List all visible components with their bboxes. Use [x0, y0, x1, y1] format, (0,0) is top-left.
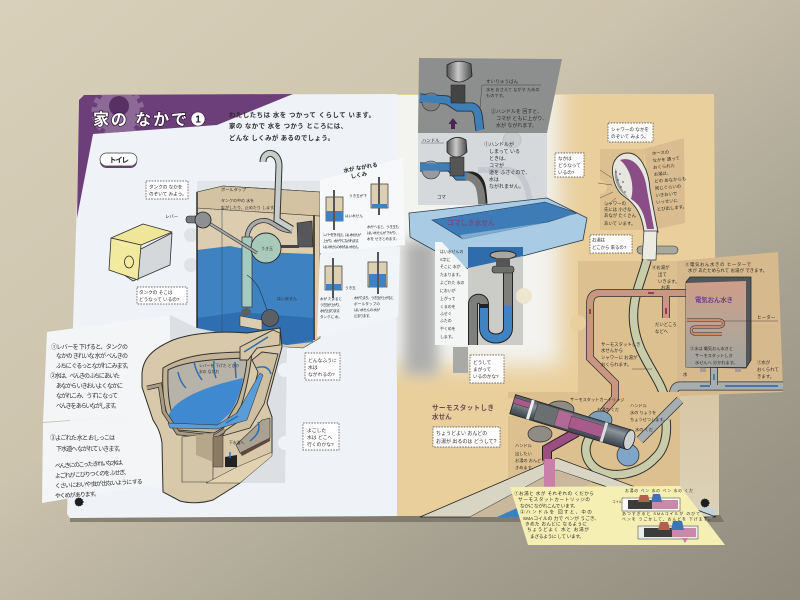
flap: how water flows, upper: 水が へると、うき玉も — [367, 224, 399, 229]
gear decoration — [92, 94, 144, 134]
flap: step 3: 下水道へ ながれて いきます。 — [56, 445, 124, 453]
flap: how water flows, upper: うき玉が下 — [349, 193, 367, 198]
panel step text: ①ハンドルが — [484, 141, 514, 148]
flap: how water flows, lower: 止まります。 — [354, 313, 372, 318]
panel notches — [278, 363, 292, 377]
heater labels: シャワーに お湯が — [601, 354, 638, 361]
cartridge diagram bottom — [638, 521, 698, 543]
mini tank diagram 1 — [326, 190, 343, 230]
flap: step 3: ③よごれた 水と おしっこは — [50, 434, 115, 442]
intro text: 家の なかで 水を つかう ところには、 — [229, 121, 347, 130]
heater coil — [687, 320, 724, 334]
explanation card: ②ハンドルを 回すと、中の — [520, 508, 592, 516]
callout: why bent: どうして — [473, 359, 492, 366]
narrow flap: trap explanation: ふたの — [440, 318, 452, 323]
heater labels: 水せんから — [601, 347, 623, 354]
faucet upper dark card: ものです。 — [486, 93, 507, 99]
flap: how water flows, upper: レバーを 下げると、はい水せんが — [323, 232, 361, 237]
callout: look inside tank: のぞいて みよう。 — [149, 190, 187, 198]
heater labels: ヒーター — [757, 314, 776, 321]
flap: how water flows, lower: ボールタップの — [354, 301, 380, 306]
shower texts: 同じぐらいの — [655, 184, 681, 192]
lever arm — [207, 222, 257, 253]
faucet lower panel: 道を ふさぐので、 — [489, 169, 530, 176]
callout: look inside shower: のぞいて みよう。 — [611, 133, 649, 140]
panel notches on tank — [184, 228, 198, 272]
callout: why bent — [470, 355, 504, 383]
flap: step 1 and 2: あなから いきおいよく なかに — [56, 383, 123, 390]
shower head — [612, 153, 678, 260]
number badge — [191, 112, 205, 126]
heater labels: 出て — [658, 271, 667, 278]
narrow flap: trap explanation — [435, 242, 468, 345]
flap: how water flows, lower: 水が 止まります。 — [320, 308, 342, 313]
flap: step 1 and 2: ①レバーを 下げると、タンクの — [51, 343, 128, 351]
narrow flap: trap explanation: くるのを — [440, 304, 456, 309]
thermostat labels: ハンドル — [515, 443, 532, 448]
card texts: すいりゅうばん — [486, 78, 519, 85]
heater labels: ①水が — [757, 359, 771, 366]
faucet lower panel — [418, 132, 547, 205]
trapway water — [168, 373, 263, 429]
faucet upper dark card: 水を おさえて ながす ための — [486, 86, 540, 93]
hot water pipes — [590, 293, 686, 415]
faucet lower panel: 水は — [489, 176, 499, 183]
mini tank diagram 2 — [371, 177, 388, 215]
explanation card: きめた おんどに なるように — [525, 520, 587, 528]
chain — [247, 275, 268, 312]
toilet bowl cutaway: 水の ながれ — [199, 369, 219, 374]
heater labels: 水 — [683, 371, 688, 377]
shower texts: いきおいで — [655, 190, 678, 198]
flap heading: しくみ — [350, 170, 368, 180]
flap heading — [343, 161, 379, 181]
thermostat labels: 水の りょうを — [630, 409, 656, 416]
hot water panel — [570, 252, 783, 396]
flap: how water flows, upper: はい水せんが 下がり、 — [367, 230, 399, 235]
toilet tank cutaway: タンクの中の 水を — [221, 197, 254, 203]
spout — [547, 432, 577, 460]
flap: how water flows, lower: 水が たまり、うき玉が 上がると — [354, 295, 394, 300]
faucet lower panel: ハンドル — [422, 138, 440, 143]
callout: where dirty water goes: よごした — [307, 427, 326, 434]
flap: step 1 and 2: ふちに ぐるっと ながれこみます。 — [56, 362, 132, 370]
cartridge diagram top — [612, 494, 680, 511]
callout: bottom of tank: どうなって いるの? — [139, 296, 180, 303]
icon: right page number — [701, 499, 709, 507]
narrow flap: trap explanation: ふせぐ — [440, 311, 452, 316]
shower texts: どの あなからも — [654, 175, 686, 185]
bowl labels: レバーを 下げた ときの — [199, 363, 239, 368]
bowl shell — [142, 328, 282, 503]
flap: step 3: べんきに のこった きれいな 水は、 — [55, 458, 127, 470]
shower texts: なかを 通って — [652, 155, 680, 164]
callout: how water flows: 水は — [308, 364, 318, 371]
callout: where dirty water goes — [303, 423, 339, 450]
mini tank diagram 4 — [368, 252, 387, 294]
heater labels: サーモスタットしき — [601, 341, 641, 348]
intro text — [229, 110, 375, 142]
thermostat labels: 出したい — [515, 450, 532, 457]
thermostat labels: 水の くだ — [635, 426, 653, 433]
callout: look inside tank — [146, 181, 188, 199]
explanation card: ベンを うごかして、おんどを 下げます。 — [622, 516, 712, 522]
right page — [397, 94, 719, 516]
electric water heater: ②水は 電気おん水きと — [690, 345, 733, 352]
faucet upper dark card: ②ハンドルを 回すと、 — [491, 108, 542, 115]
faucet upper dark card — [418, 58, 562, 133]
base interior — [182, 433, 213, 482]
icon: left page number — [75, 498, 83, 506]
flap: how water flows, upper: 水を せきとめます。 — [367, 236, 399, 241]
toilet tank cutaway: はい水せん — [277, 295, 297, 301]
electric water heater: 電気おん水き — [695, 295, 733, 304]
panel labels — [421, 142, 444, 144]
faucet upper dark card: コマが ともに上がり、 — [496, 115, 547, 122]
flap: step 1 and 2: ②水は、べんきの ふちに あいた — [50, 372, 120, 380]
heater labels: お湯 — [661, 284, 670, 291]
flap: how water flows, upper — [320, 158, 405, 253]
callout: look inside tank: タンクの なかを — [149, 184, 183, 190]
faucet lower panel: コマ — [437, 194, 446, 200]
toilet tank cutaway — [186, 153, 320, 348]
closed faucet body — [420, 167, 483, 204]
label: lever: レバー — [165, 214, 178, 219]
explanation card: ちょうどよく 水と お湯が — [527, 526, 589, 533]
faucet lower panel: ながれません。 — [489, 183, 524, 190]
callout: how water flows: どんなふうに — [308, 357, 337, 364]
cold water pipes — [650, 367, 783, 445]
flap: how water flows, lower: 水が たまると — [320, 296, 342, 301]
toilet tank cutaway: ながしたり、止めたり します。 — [221, 204, 278, 210]
shower texts: あいて います。 — [604, 220, 635, 227]
thermostat labels — [515, 396, 667, 471]
toilet bowl cutaway: 下水道へ — [229, 440, 244, 445]
panel notch — [516, 288, 532, 304]
narrow flap: trap explanation: やくめを — [440, 326, 456, 331]
flap: step 1 and 2: べんきを あらいながします。 — [56, 402, 120, 410]
explanation card: まざるように して います。 — [530, 533, 584, 540]
faucet lower panel: コマが — [489, 162, 504, 169]
flap heading: 水が ながれる — [343, 161, 378, 174]
mini tank diagram 3 — [325, 258, 342, 298]
explanation card: お湯の ベン 水の ベン 水の くだ — [625, 488, 693, 493]
callout: inside faucet: どうなって — [558, 162, 581, 169]
float ball — [251, 233, 281, 263]
supply pipe — [263, 153, 292, 229]
cartridge diagram top: コイル — [612, 500, 623, 504]
heater labels: おくられて — [757, 366, 779, 373]
callout: why the right temperature: お湯が 出るのは どうして? — [436, 438, 497, 445]
left page — [67, 94, 400, 518]
explanation card: サーモスタットカートリッジの — [518, 496, 590, 503]
thermostat faucet — [510, 395, 639, 490]
hose loop over panel — [586, 420, 666, 475]
flow arrows — [178, 337, 271, 458]
heater flap — [677, 252, 783, 396]
shower hole dots — [615, 171, 626, 193]
toilet tank cutaway: うき玉 — [261, 245, 273, 251]
flap: step 3 — [42, 413, 170, 503]
explanation card: なかに ながれこんで います。 — [520, 502, 578, 510]
book shadow — [70, 515, 724, 522]
float tube — [247, 221, 292, 238]
heater labels: 水が あたためられて お湯が できます。 — [688, 267, 767, 274]
flush valve — [240, 316, 262, 330]
shower texts: おくられた — [653, 162, 675, 171]
narrow flap: trap explanation: します。 — [440, 334, 455, 339]
holder collar — [637, 246, 678, 254]
flap: how water flows, upper: はい水せん — [345, 213, 363, 218]
narrow flap: trap explanation: たまります。 — [440, 272, 463, 277]
bowl inner — [168, 358, 247, 427]
ball tap — [297, 221, 313, 247]
toilet section label: トイレ — [109, 156, 129, 164]
narrow flap: trap explanation: 上がって — [440, 296, 455, 301]
heater labels: おくられます。 — [601, 361, 631, 368]
faucet lower panel: しまって いる — [489, 149, 520, 155]
heater labels: などへ — [655, 328, 669, 334]
callout: where dirty water goes: 水は どこへ — [307, 434, 332, 441]
drain pipe under trap — [453, 347, 468, 373]
electric water heater: サーモスタットしき — [695, 352, 733, 359]
shower spray lines — [598, 170, 616, 206]
number badge: 1 — [195, 114, 201, 126]
shower texts: 先には 小さな — [604, 206, 632, 213]
faded open faucet — [478, 132, 530, 205]
callout: inside faucet — [555, 153, 584, 177]
narrow flap: trap explanation: そこに 水が — [440, 264, 461, 269]
explanation card — [510, 486, 725, 545]
icon: up arrow — [448, 118, 458, 129]
flap: step 3: よごれが こびりつくのを ふせぎ、 — [55, 468, 130, 480]
page heading: 家の なかで — [93, 111, 187, 129]
hot pipe over panel — [603, 392, 615, 412]
thermostat labels: ちょうせつします。 — [630, 417, 667, 423]
shower texts: シャワーの — [604, 201, 626, 206]
notch — [593, 180, 607, 194]
narrow flap: trap explanation: S字に — [440, 257, 450, 262]
intro text: わたしたちは 水を つかって くらして います。 — [229, 110, 375, 119]
bowl outer wall — [163, 352, 252, 433]
flap: step 3: くさい においや 虫が 出ないように する — [55, 477, 143, 490]
callout: look inside shower — [608, 123, 653, 142]
flap: how water flows, lower — [317, 247, 400, 337]
reflection glare — [375, 70, 560, 375]
callout: why bent: いるのかな? — [473, 373, 499, 380]
callout: why the right temperature — [433, 427, 500, 447]
rim channel left — [147, 385, 225, 437]
electric water heater: 水せんへ 分かれます。 — [695, 359, 738, 366]
faucet upper dark card: 水が ながれます。 — [496, 122, 537, 129]
shower texts: とび出します。 — [656, 203, 687, 213]
flap: how water flows, upper: 上がり、水が 下に ながれます。 — [323, 238, 361, 243]
callout: why bent: まがって — [473, 366, 492, 373]
sink basin — [409, 198, 587, 270]
trapway arch — [222, 352, 278, 436]
callout: bottom of tank — [137, 287, 187, 304]
title banner — [77, 88, 293, 218]
toilet bowl panel — [170, 315, 292, 483]
explanation card: ①お湯と 水が それぞれの くだから — [514, 490, 594, 497]
toilet section label — [100, 153, 137, 168]
shower texts: ホースの — [652, 150, 669, 156]
thermostat mixer panel — [500, 392, 680, 512]
heater labels: ③電気おん水きの ヒーターで — [685, 261, 752, 268]
toilet bowl cutaway — [142, 328, 282, 503]
callout: where dirty water goes: 行くのかな? — [307, 441, 334, 448]
shower texts — [604, 123, 689, 227]
callout: bottom of tank: タンクの そこは — [139, 289, 173, 296]
intro text: どんな しくみが あるのでしょう。 — [229, 133, 334, 142]
inlet tube — [240, 330, 280, 360]
thermostat labels: お湯の おんどを — [515, 457, 545, 464]
flap: step 1 and 2: なかの きれいな 水が べんきの — [56, 352, 128, 360]
flap: how water flows, upper: はい水せんの 水が はい水せん。 — [323, 244, 361, 249]
shower texts: いっせいに — [656, 198, 678, 206]
flap: step 1 and 2: ながれこみ、うずに なって — [56, 392, 118, 400]
drain trap panel — [468, 247, 532, 345]
explanation card: SMAコイルの 力で ベンが うごき、 — [523, 515, 599, 522]
trap pipe — [473, 270, 508, 345]
callout: inside faucet: いるの? — [558, 170, 575, 175]
narrow flap: trap explanation: はい水せんの — [440, 249, 463, 254]
narrow flap: trap explanation: よごれた 水の — [440, 280, 465, 285]
flap: how water flows, lower: うき玉が 上がり、 — [320, 302, 342, 307]
thermostat labels: お湯の くだ — [597, 406, 619, 413]
callout: how water flows: ながれるの? — [308, 371, 335, 378]
heater labels: だいどころ — [655, 321, 677, 328]
heater labels: いきます。 — [658, 278, 680, 285]
callout: look inside shower: シャワーの なかを — [611, 126, 649, 133]
tub rim — [420, 458, 716, 517]
callout: how water flows — [305, 353, 340, 380]
sink type label: コマしき水せん — [447, 218, 495, 227]
callout: where hot water comes from: お湯は — [592, 236, 606, 244]
callout: where hot water comes from — [590, 235, 632, 253]
drain flange — [490, 251, 516, 259]
shower flap — [644, 138, 685, 230]
open faucet pipe — [420, 98, 480, 130]
tank labels: ボールタップ — [221, 186, 247, 193]
electric water heater — [686, 277, 751, 372]
shower texts: あなが たくさん — [604, 212, 637, 219]
explanation card: あつすぎると SMAコイルが のびて — [622, 511, 700, 516]
flow arrows — [590, 293, 666, 314]
faucet lower panel: ときは、 — [489, 155, 509, 162]
thermostat labels: ハンドル — [630, 403, 647, 408]
hose — [586, 260, 668, 475]
heater labels: ④お湯が — [652, 264, 670, 271]
narrow flap: trap explanation: においが — [440, 288, 456, 293]
thermostat heading — [432, 403, 494, 421]
shower panel — [593, 138, 685, 230]
icon: toilet paper holder — [109, 224, 172, 281]
flap: step 3: やくめが あります。 — [55, 490, 100, 500]
flap: how water flows, lower: うき玉 — [345, 285, 356, 290]
callout: inside faucet: なかは — [558, 155, 572, 162]
water in bowl — [168, 378, 243, 425]
thermostat labels: サーモスタットカートリッジ — [570, 396, 624, 403]
water stream — [544, 459, 555, 490]
flow arrows — [700, 374, 778, 386]
flap: how water flows, lower: はい水せんの 水が — [354, 307, 380, 312]
book spread pages — [67, 70, 724, 522]
thermostat heading: サーモスタットしき — [432, 403, 494, 412]
flap: step 1 and 2 — [43, 315, 170, 422]
faucet mounts behind — [528, 401, 639, 466]
thermostat heading: 水せん — [432, 412, 452, 421]
flap: how water flows, lower: タンクに 水。 — [320, 314, 342, 319]
callout: where hot water comes from: どこから 来るの? — [592, 244, 627, 251]
shower texts: お湯は、 — [653, 169, 672, 178]
lower passage — [236, 418, 270, 453]
thermostat labels: きめます。 — [515, 465, 536, 471]
heater labels — [601, 261, 779, 380]
heater labels: きます。 — [757, 373, 774, 380]
cold pipe over panel — [640, 400, 680, 440]
mixer cylinder — [510, 395, 637, 451]
callout: why the right temperature: ちょうどよい おんどの — [436, 430, 487, 437]
